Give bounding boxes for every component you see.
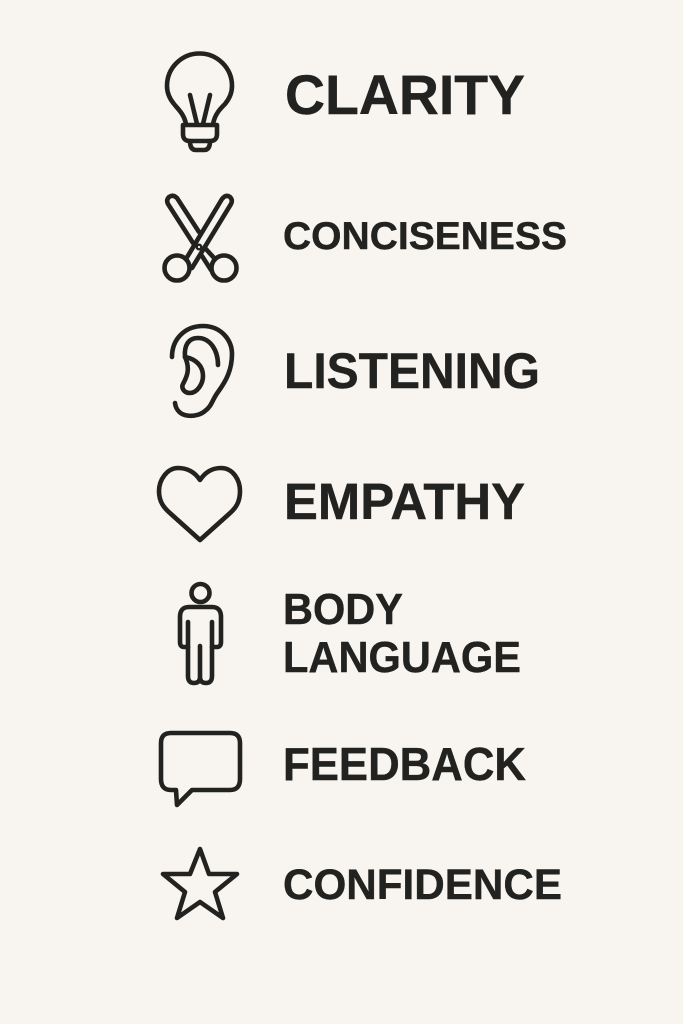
heading: feedback: FEEDBACK <box>283 738 526 790</box>
icon: scissors <box>164 196 236 280</box>
icon: star <box>163 849 237 918</box>
heading: body language second line: LANGUAGE <box>283 633 521 682</box>
heading: empathy: EMPATHY <box>284 473 525 530</box>
heading: clarity: CLARITY <box>285 63 525 126</box>
icon: person <box>180 584 221 683</box>
icon: speech bubble <box>161 733 240 805</box>
heading: conciseness: CONCISENESS <box>283 215 567 258</box>
heading: body language: BODY <box>283 585 403 634</box>
heading: confidence: CONFIDENCE <box>283 861 562 909</box>
icon: heart <box>159 468 240 540</box>
heading: listening: LISTENING <box>284 343 540 399</box>
icon: ear <box>172 326 232 416</box>
icon: light bulb <box>167 54 232 150</box>
